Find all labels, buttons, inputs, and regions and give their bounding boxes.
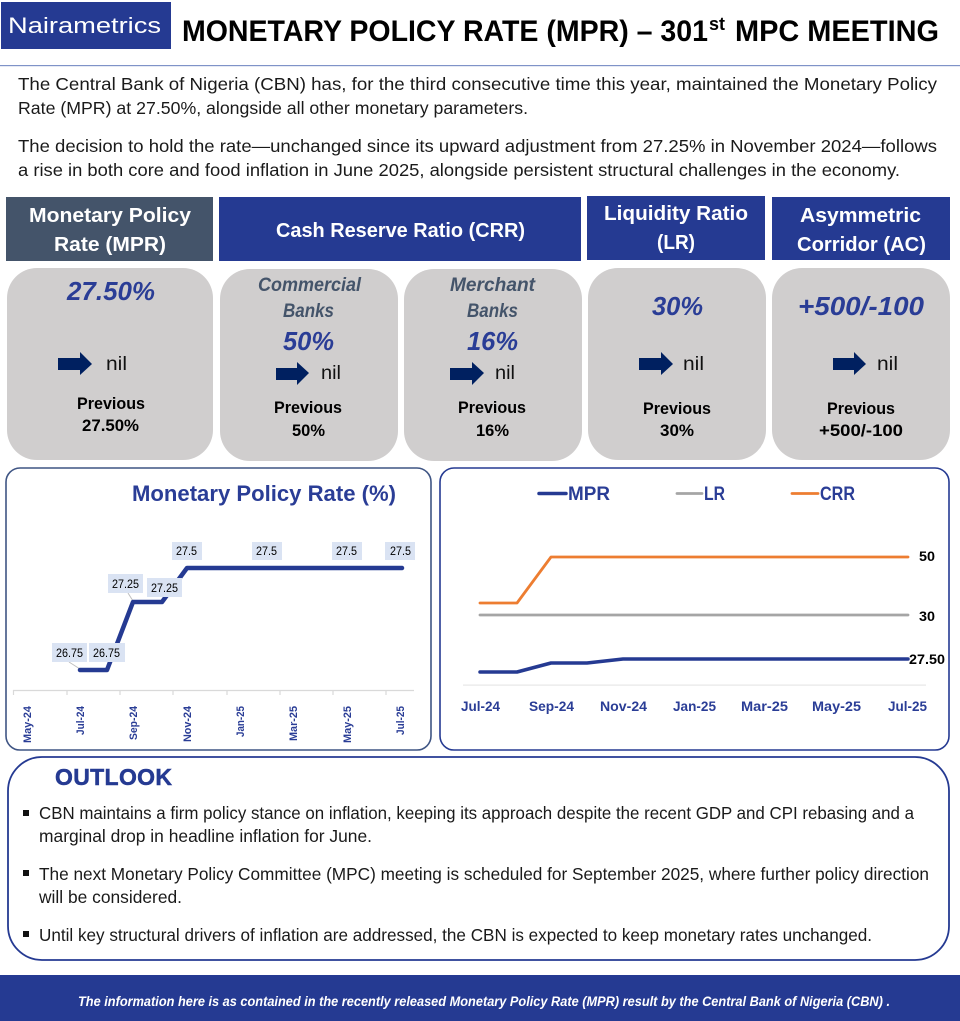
end values: 27.50 xyxy=(909,652,945,667)
axis labels: Jul-25 xyxy=(395,706,407,735)
panel: CRR merchant banks card xyxy=(404,269,582,461)
panel: CRR merchant banks card: Merchant xyxy=(450,274,536,296)
panel: MPR card: 27.50% xyxy=(66,276,155,306)
legend: MPR xyxy=(568,484,610,505)
panel: Asymmetric Corridor card: +500/-100 xyxy=(819,422,903,440)
axis labels: May-24 xyxy=(22,705,34,743)
title: MONETARY POLICY RATE (MPR) – 301 xyxy=(182,15,708,48)
chart title: Monetary Policy Rate (%) xyxy=(132,481,396,506)
axis labels: Jul-24 xyxy=(461,699,500,714)
axis labels: May-25 xyxy=(342,706,354,743)
intro text xyxy=(18,74,937,180)
axis labels: Mar-25 xyxy=(288,706,300,741)
bullet 2: The next Monetary Policy Committee (MPC) meeting is scheduled for September 2025, where further policy direction xyxy=(39,864,929,884)
end values: 30 xyxy=(919,609,935,624)
header: Asymmetric Corridor: Corridor (AC) xyxy=(797,233,926,256)
axis labels: May-25 xyxy=(812,699,862,714)
axis labels: Jan-25 xyxy=(235,706,247,737)
panel: CRR merchant banks card: nil xyxy=(495,363,515,384)
header: Asymmetric Corridor: Asymmetric xyxy=(800,204,921,227)
panel: CRR merchant banks card: 16% xyxy=(467,326,518,356)
intro text: The decision to hold the rate—unchanged since its upward adjustment from 27.25% in November 2024—follows xyxy=(18,136,937,156)
data labels: 26.75 xyxy=(56,648,83,660)
panel: CRR commercial banks card: Commercial xyxy=(258,274,362,296)
header: Asymmetric Corridor xyxy=(772,197,950,260)
panel: MPR card xyxy=(7,268,213,460)
data labels: 27.5 xyxy=(390,546,411,558)
CRR line xyxy=(480,557,908,603)
legend: LR xyxy=(704,484,725,505)
axis labels: Sep-24 xyxy=(529,699,574,714)
data labels: 26.75 xyxy=(93,648,120,660)
panel: Liquidity Ratio card: 30% xyxy=(660,422,694,440)
bullet 3: Until key structural drivers of inflation are addressed, the CBN is expected to keep monetary rates unchanged. xyxy=(39,925,872,945)
outlook heading: OUTLOOK xyxy=(55,764,172,790)
header: Liquidity Ratio: Liquidity Ratio xyxy=(604,202,748,225)
footer: The information here is as contained in the recently released Monetary Policy Rate (MPR) result by the Central Bank of Nigeria (CBN) . xyxy=(78,994,890,1009)
MPR line xyxy=(80,568,402,670)
bullet 2: will be considered. xyxy=(38,887,182,907)
panel: CRR commercial banks card: 50% xyxy=(283,326,334,356)
data labels: 27.5 xyxy=(336,546,357,558)
axis labels: Nov-24 xyxy=(600,699,648,714)
panel: MPR card: 27.50% xyxy=(82,417,139,435)
data labels: 27.25 xyxy=(112,579,139,591)
panel: outlook xyxy=(8,757,949,960)
end values: 50 xyxy=(919,549,935,564)
axis labels: Nov-24 xyxy=(182,705,194,742)
panel: CRR commercial banks card: nil xyxy=(321,363,341,384)
logo: Nairametrics: Nairametrics xyxy=(8,13,161,38)
LR line xyxy=(480,614,908,616)
bullet 2 xyxy=(23,864,929,907)
data labels: 27.5 xyxy=(176,546,197,558)
panel: MPR, LR and CRR line chart xyxy=(440,468,949,750)
MPR line xyxy=(480,659,908,672)
panel: MPR line chart xyxy=(6,468,431,750)
panel: CRR merchant banks card: Banks xyxy=(467,300,518,322)
panel: Liquidity Ratio card xyxy=(588,268,766,460)
panel: CRR commercial banks card: 50% xyxy=(292,422,325,440)
intro text: Rate (MPR) at 27.50%, alongside all other monetary parameters. xyxy=(18,98,528,118)
data labels xyxy=(52,542,415,662)
data labels: 27.25 xyxy=(151,583,178,595)
header: Monetary Policy Rate xyxy=(6,197,213,261)
title: st xyxy=(709,14,725,34)
axis labels: Sep-24 xyxy=(128,705,140,740)
panel: CRR commercial banks card: Previous xyxy=(274,399,342,417)
logo: Nairametrics xyxy=(1,2,171,49)
header: Liquidity Ratio xyxy=(587,196,765,260)
intro text: a rise in both core and food inflation in June 2025, alongside persistent structural challenges in the economy. xyxy=(18,160,900,180)
title: MPC MEETING xyxy=(735,15,939,48)
panel: Asymmetric Corridor card xyxy=(772,268,950,460)
header: Liquidity Ratio: (LR) xyxy=(657,231,695,254)
bullet 1: marginal drop in headline inflation for June. xyxy=(39,826,372,846)
panel: Liquidity Ratio card: 30% xyxy=(652,291,703,321)
data labels: 27.5 xyxy=(256,546,277,558)
header: Cash Reserve Ratio xyxy=(219,197,581,261)
axis labels xyxy=(461,699,927,714)
bullet 1: CBN maintains a firm policy stance on inflation, keeping its approach despite the recent GDP and CPI rebasing and a xyxy=(39,803,914,823)
axis labels: Jul-24 xyxy=(75,705,87,735)
intro text: The Central Bank of Nigeria (CBN) has, for the third consecutive time this year, maintained the Monetary Policy xyxy=(18,74,937,94)
header: Monetary Policy Rate: Monetary Policy xyxy=(29,204,192,227)
panel: CRR merchant banks card: 16% xyxy=(476,422,509,440)
panel: Liquidity Ratio card: Previous xyxy=(643,400,711,418)
end values xyxy=(909,549,945,667)
axis labels: Jul-25 xyxy=(888,699,927,714)
panel: Asymmetric Corridor card: Previous xyxy=(827,400,895,418)
panel: CRR merchant banks card: Previous xyxy=(458,399,526,417)
header: Cash Reserve Ratio: Cash Reserve Ratio (CRR) xyxy=(276,219,525,242)
axis labels xyxy=(22,705,407,743)
header: Monetary Policy Rate: Rate (MPR) xyxy=(54,233,166,256)
panel: CRR commercial banks card xyxy=(220,269,398,461)
axis labels: Jan-25 xyxy=(673,699,716,714)
legend xyxy=(539,484,855,505)
panel: Asymmetric Corridor card: +500/-100 xyxy=(798,291,925,321)
panel: Liquidity Ratio card: nil xyxy=(683,354,704,375)
panel: Asymmetric Corridor card: nil xyxy=(877,354,898,375)
footer xyxy=(0,975,960,1021)
bullet 1 xyxy=(23,803,914,846)
panel: MPR card: nil xyxy=(106,354,127,375)
panel: CRR commercial banks card: Banks xyxy=(283,300,334,322)
legend: CRR xyxy=(820,484,855,505)
axis labels: Mar-25 xyxy=(741,699,789,714)
panel: MPR card: Previous xyxy=(77,395,145,413)
